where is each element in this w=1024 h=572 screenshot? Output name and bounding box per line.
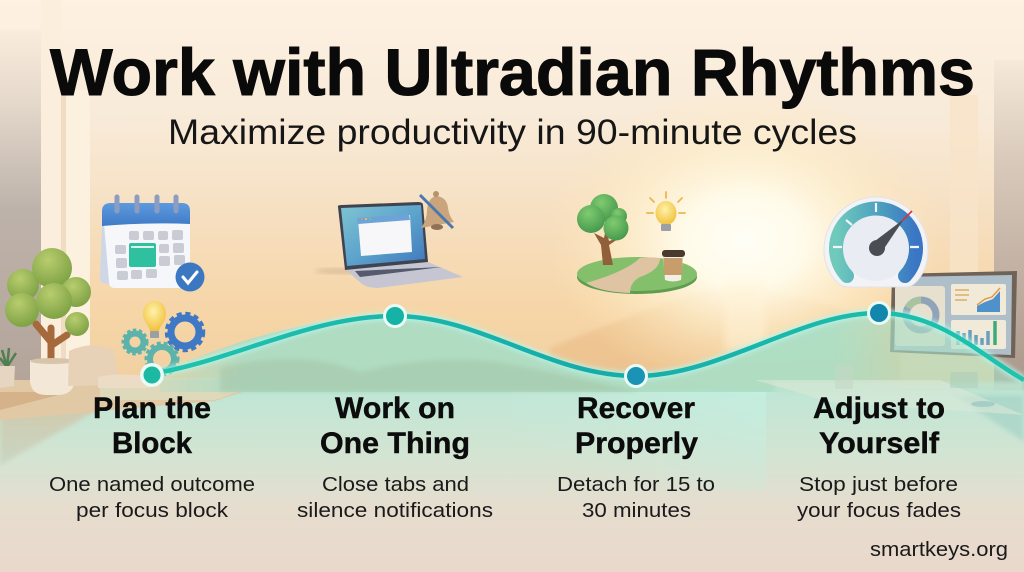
step 1 text: Block (112, 427, 193, 460)
step 1 text (49, 392, 255, 522)
decorative stone stool (68, 345, 150, 388)
step 4 text (797, 392, 961, 522)
icon: small plant (0, 348, 16, 388)
step 4 text: Yourself (819, 427, 939, 460)
step 2 text: silence notifications (297, 499, 493, 522)
marker 2 (383, 304, 407, 328)
step 2 text: Close tabs and (322, 473, 469, 496)
wave line (150, 313, 1024, 380)
step 4 text: Stop just before (799, 473, 958, 496)
step 3 text (557, 392, 715, 522)
icon: potted tree (5, 248, 91, 395)
step 1 text: per focus block (76, 499, 229, 522)
marker 3 (624, 364, 648, 388)
icon: tree on path island with bulb and coffee (577, 192, 697, 294)
icon: laptop with muted bell (315, 191, 463, 288)
step 4 text: your focus fades (797, 499, 961, 522)
monitor with dashboard in background (890, 271, 1017, 358)
step 4 text: Adjust to (813, 392, 945, 425)
step 3 text: 30 minutes (582, 499, 691, 522)
title: Work with Ultradian Rhythms (50, 35, 975, 109)
step 3 text: Properly (575, 427, 699, 460)
subtitle: Maximize productivity in 90-minute cycles (168, 113, 857, 152)
marker 4 (867, 301, 891, 325)
step 1 text: One named outcome (49, 473, 255, 496)
step 2 text (297, 392, 493, 522)
icon: calendar (100, 197, 204, 292)
icon: gears and lightbulb (123, 301, 203, 375)
step 3 text: Detach for 15 to (557, 473, 715, 496)
step 2 text: Work on (335, 392, 455, 425)
faint desk items (755, 365, 1024, 415)
marker 1 (140, 363, 164, 387)
step 3 text: Recover (577, 392, 696, 425)
step 2 text: One Thing (320, 427, 470, 460)
source credit: smartkeys.org (870, 538, 1008, 561)
mint fill under the wave (160, 313, 1024, 396)
step 1 text: Plan the (93, 392, 211, 425)
icon: speedometer gauge (824, 197, 928, 287)
